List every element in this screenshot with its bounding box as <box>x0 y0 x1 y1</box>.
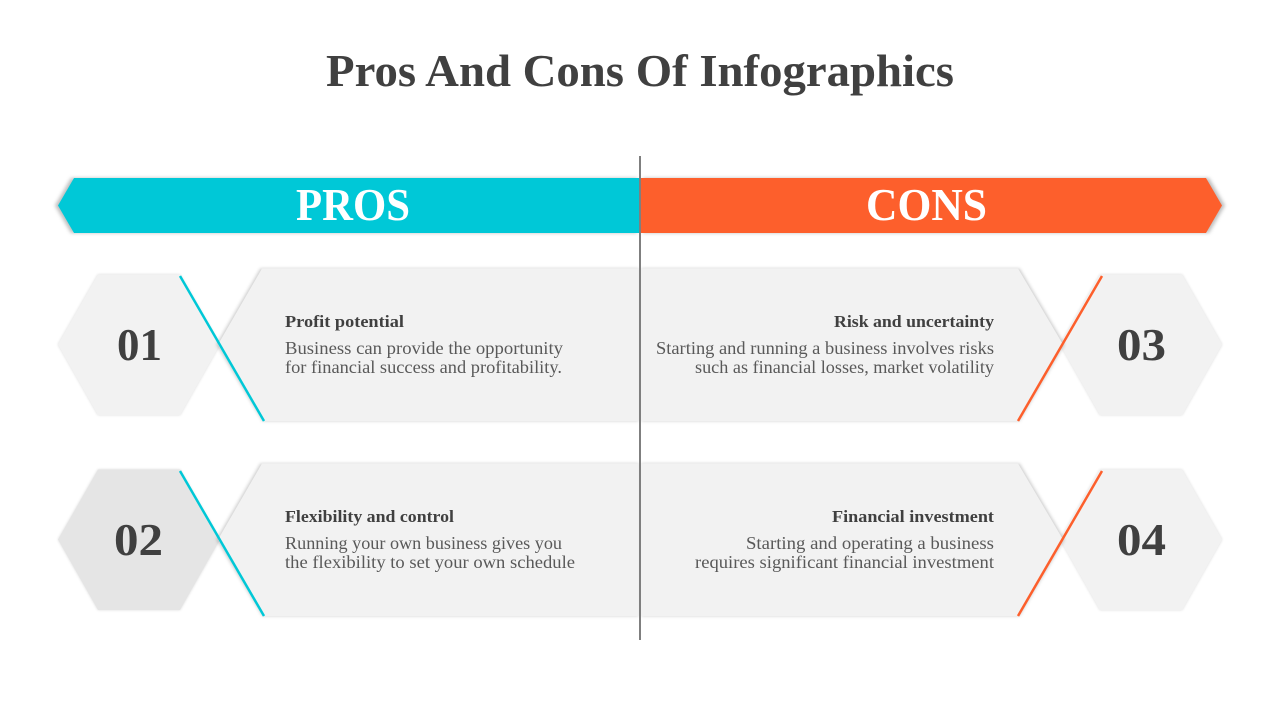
hexagon 03 <box>1060 274 1222 415</box>
panel: risk and uncertainty <box>640 268 1063 421</box>
hexagon 02 <box>58 470 220 610</box>
accent line <box>180 276 264 421</box>
panel: financial investment: Starting and operating a business <box>746 533 994 553</box>
accent line <box>180 471 264 616</box>
banner: pros: PROS <box>296 179 410 230</box>
hexagon 02: 02 <box>114 514 163 565</box>
panel: risk and uncertainty: such as financial losses, market volatility <box>695 357 994 377</box>
hexagon 04 <box>1060 470 1222 610</box>
center divider <box>639 156 641 640</box>
panel: risk and uncertainty: Risk and uncertainty <box>834 312 995 331</box>
hexagon 01 <box>58 274 220 415</box>
row 1 pro: profit potential <box>58 268 640 421</box>
panel: flexibility and control: the flexibility to set your own schedule <box>285 552 575 572</box>
panel: flexibility and control: Running your own business gives you <box>285 533 562 553</box>
panel: flexibility and control <box>218 464 640 616</box>
banner: pros <box>58 178 640 233</box>
panel: financial investment: requires significant financial investment <box>695 552 994 572</box>
hexagon 04: 04 <box>1117 514 1166 565</box>
panel: profit potential: Business can provide the opportunity <box>285 338 563 358</box>
accent line <box>1018 276 1102 421</box>
title: Pros And Cons Of Infographics <box>326 45 954 96</box>
panel: risk and uncertainty: Starting and running a business involves risks <box>656 338 994 358</box>
panel: financial investment <box>640 464 1063 616</box>
panel: profit potential: Profit potential <box>285 312 404 331</box>
accent line <box>1018 471 1102 616</box>
panel: flexibility and control: Flexibility and control <box>285 507 454 526</box>
panel: profit potential <box>218 268 640 421</box>
row 2 pro: flexibility and control <box>58 464 640 616</box>
panel: financial investment: Financial investment <box>832 507 994 526</box>
hexagon 01: 01 <box>117 319 162 370</box>
row 2 con: financial investment <box>640 464 1222 616</box>
banner: cons <box>640 178 1222 233</box>
panel: profit potential: for financial success and profitability. <box>285 357 562 377</box>
row 1 con: risk and uncertainty <box>640 268 1222 421</box>
hexagon 03: 03 <box>1117 319 1166 370</box>
banner: cons: CONS <box>866 179 987 230</box>
